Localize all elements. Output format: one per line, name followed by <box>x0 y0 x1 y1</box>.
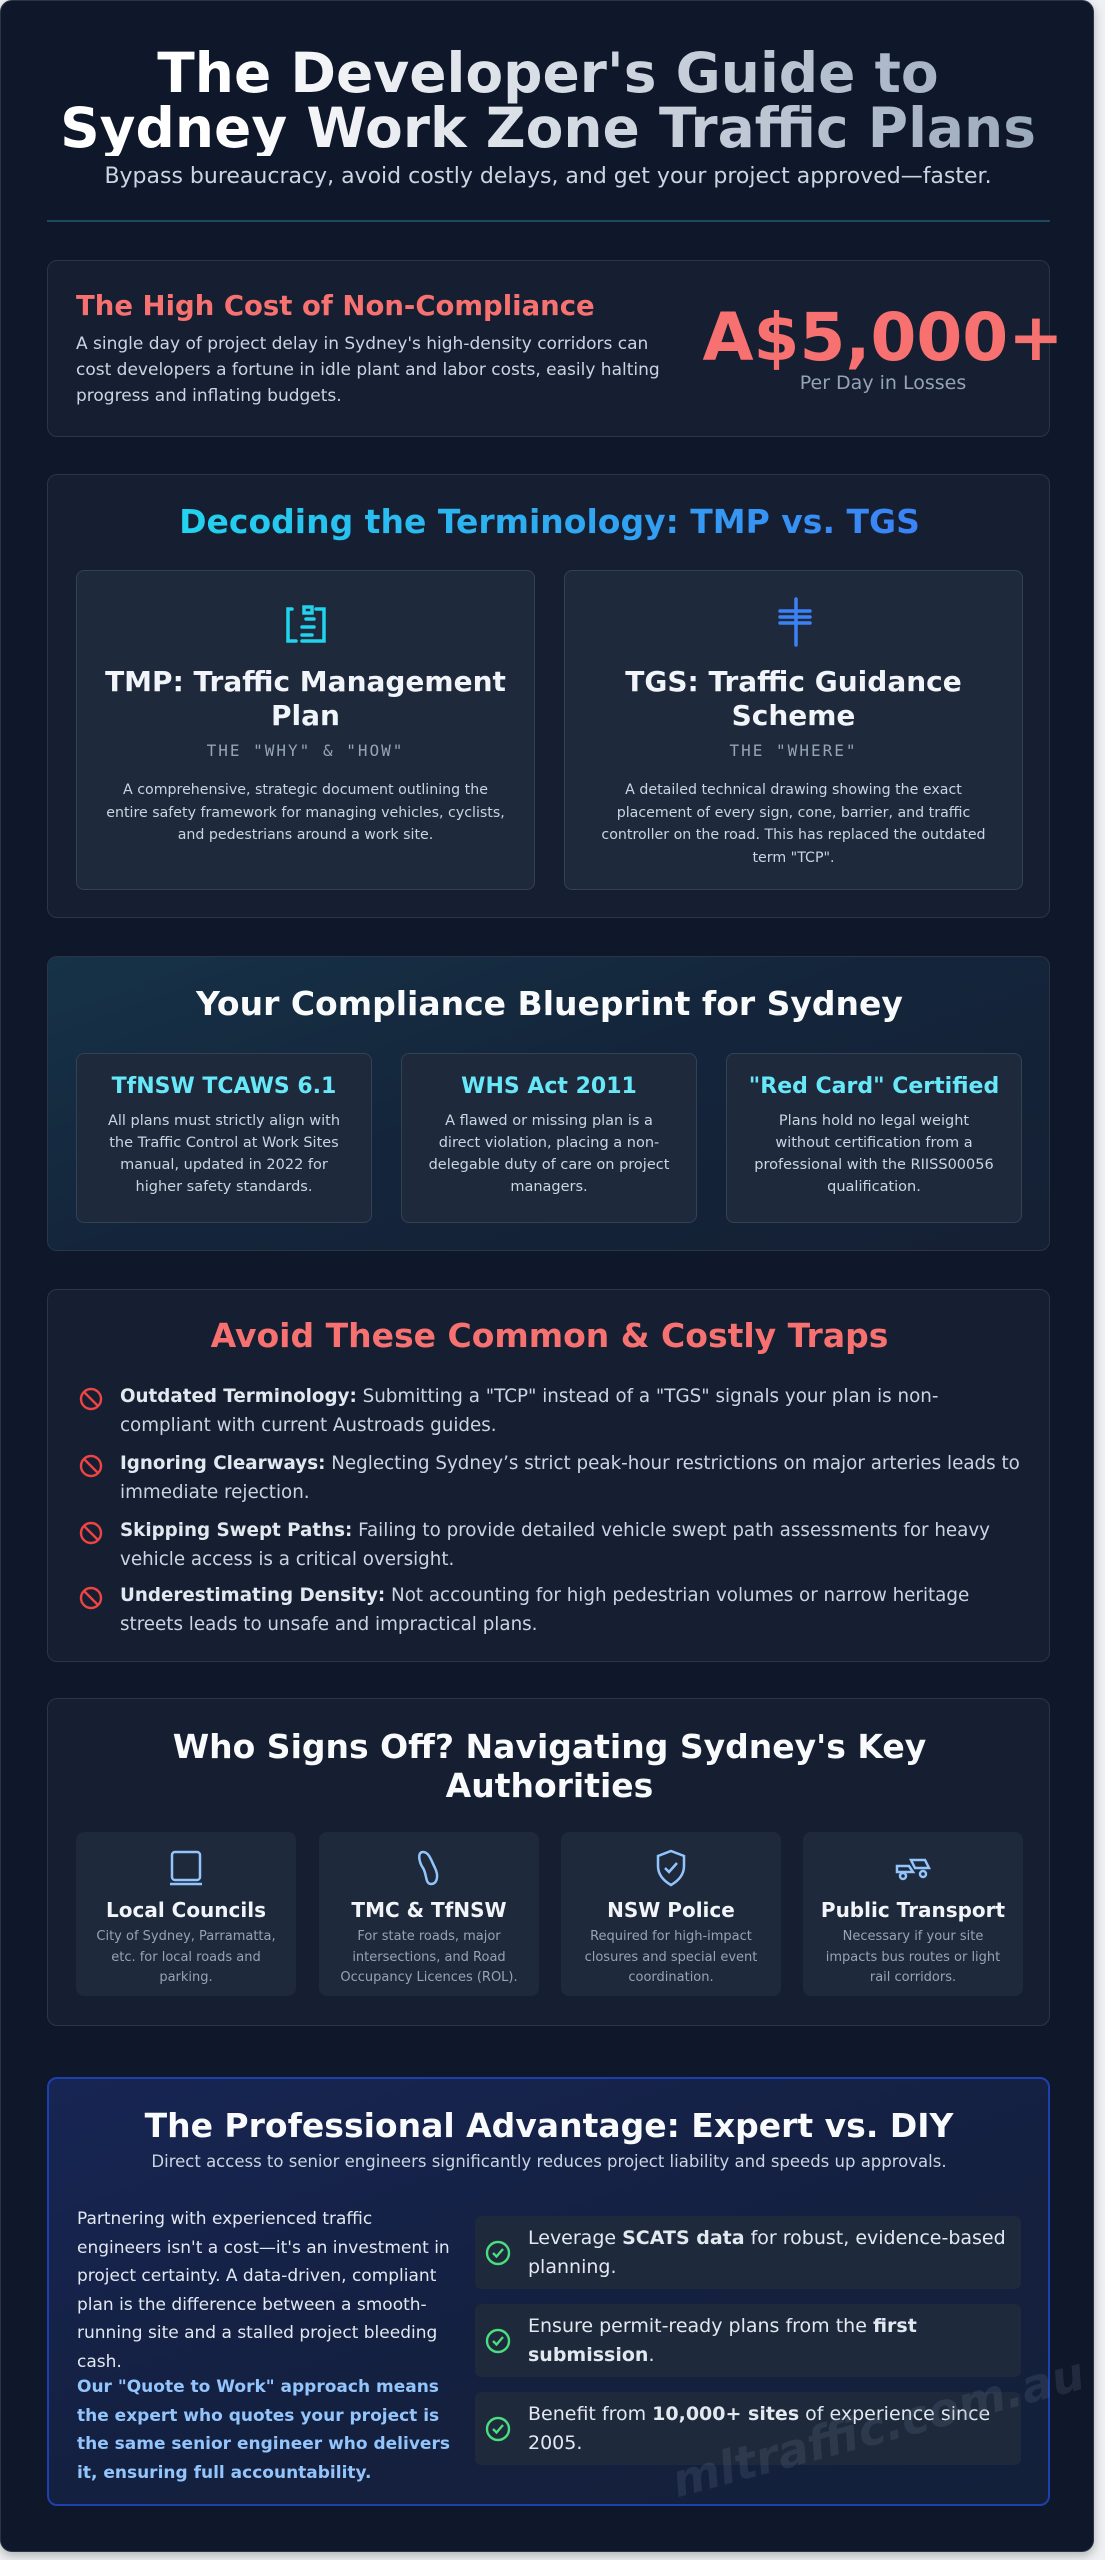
trap: density: Underestimating Density: Not accounting for high pedestrian volumes or narrow heritage streets leads to unsafe and impractical plans. <box>120 1585 969 1635</box>
subtitle: Bypass bureaucracy, avoid costly delays, and get your project approved—faster. <box>104 164 992 189</box>
benefit: SCATS: Leverage SCATS data for robust, evidence-based planning. <box>528 2227 1006 2278</box>
card: public transport: Necessary if your site impacts bus routes or light rail corridors. <box>826 1929 1000 1985</box>
card: TCAWS: TfNSW TCAWS 6.1 <box>112 1074 336 1099</box>
text: TGS description: A detailed technical drawing showing the exact placement of every sign, cone, barrier, and traffic controller on the road. This has replaced the outdated term "TCP". <box>601 782 986 866</box>
trap: swept paths: Skipping Swept Paths: Failing to provide detailed vehicle swept path assessments for heavy vehicle access is a critical oversight. <box>120 1520 990 1570</box>
heading: authorities: Who Signs Off? Navigating Sydney's Key <box>173 1727 926 1766</box>
card: red card: "Red Card" Certified <box>749 1074 999 1099</box>
subtitle: where: THE "WHERE" <box>730 741 857 760</box>
trap: terminology: Outdated Terminology: Submitting a "TCP" instead of a "TGS" signals your plan is non-compliant with current Austroads guides. <box>120 1386 938 1436</box>
card: TCAWS <box>76 1053 372 1223</box>
stat: A$5,000+: A$5,000+ <box>702 299 1064 376</box>
card: WHS: A flawed or missing plan is a direct violation, placing a non-delegable duty of care on project managers. <box>429 1113 669 1195</box>
card: NSW Police: NSW Police <box>607 1898 735 1922</box>
panel: terminology <box>47 474 1050 918</box>
stat: A$5,000+: Per Day in Losses <box>800 372 966 394</box>
benefit: first submission: Ensure permit-ready plans from the first submission. <box>528 2315 917 2366</box>
watermark: mltraffic.com.au <box>666 2346 1090 2508</box>
card: local councils: Local Councils <box>106 1898 266 1922</box>
benefit: SCATS <box>475 2216 1021 2289</box>
text: quote to work: Our "Quote to Work" approach means the expert who quotes your project is the same senior engineer who delivers it, ensuring full accountability. <box>77 2377 450 2483</box>
card: TGS <box>564 570 1023 890</box>
card: WHS <box>401 1053 697 1223</box>
subtitle: why & how: THE "WHY" & "HOW" <box>207 741 404 760</box>
card: local councils <box>76 1832 296 1996</box>
title <box>1 46 1095 156</box>
text: partnering: Partnering with experienced traffic engineers isn't a cost—it's an investment in project certainty. A data-driven, compliant plan is the difference between a smooth-running site and a stalled project bleeding cash. <box>77 2209 450 2372</box>
card: NSW Police <box>561 1832 781 1996</box>
heading: professional advantage: The Professional Advantage: Expert vs. DIY <box>145 2106 953 2145</box>
heading: traps: Avoid These Common & Costly Traps <box>211 1316 888 1355</box>
heading: TMP vs TGS: Decoding the Terminology: TMP vs. TGS <box>179 502 920 541</box>
trap: clearways: Ignoring Clearways: Neglecting Sydney’s strict peak-hour restrictions on major arteries leads to immediate rejection. <box>120 1453 1020 1503</box>
panel: authorities <box>47 1698 1050 2026</box>
card: TMC & TfNSW <box>319 1832 539 1996</box>
panel: compliance blueprint <box>47 956 1050 1251</box>
card: TMC & TfNSW: For state roads, major intersections, and Road Occupancy Licences (ROL). <box>340 1929 518 1985</box>
card: WHS: WHS Act 2011 <box>461 1074 637 1099</box>
card: public transport: Public Transport <box>821 1898 1005 1922</box>
heading: blueprint: Your Compliance Blueprint for Sydney <box>196 984 903 1023</box>
heading: authorities: Authorities <box>446 1766 653 1805</box>
title: TMP: TMP: Traffic Management Plan <box>105 665 506 732</box>
benefit: 10,000+ sites: Benefit from 10,000+ sites of experience since 2005. <box>528 2403 990 2454</box>
benefit: first submission <box>475 2304 1021 2377</box>
card: TCAWS: All plans must strictly align with the Traffic Control at Work Sites manual, updated in 2022 for higher safety standards. <box>108 1113 340 1195</box>
benefit: 10,000+ sites <box>475 2392 1021 2465</box>
card: TMC & TfNSW: TMC & TfNSW <box>351 1898 507 1922</box>
icon: clipboard <box>286 605 326 643</box>
title: Sydney Work Zone Traffic Plans <box>60 96 1036 160</box>
heading: high cost: The High Cost of Non-Compliance <box>76 290 595 322</box>
panel: costly traps <box>47 1289 1050 1662</box>
title: The Developer's Guide to <box>157 41 939 105</box>
heading: authorities <box>173 1727 926 1805</box>
text: TMP description: A comprehensive, strategic document outlining the entire safety framework for managing vehicles, cyclists, and pedestrians around a work site. <box>106 782 505 843</box>
card: public transport <box>803 1832 1023 1996</box>
panel: cost of non-compliance <box>47 260 1050 437</box>
panel: professional advantage <box>47 2077 1050 2506</box>
card: red card <box>726 1053 1022 1223</box>
icon: signs <box>778 597 812 647</box>
card: local councils: City of Sydney, Parramatta, etc. for local roads and parking. <box>96 1929 276 1985</box>
card: TMP <box>76 570 535 890</box>
card: red card: Plans hold no legal weight without certification from a professional with the RIISS00056 qualification. <box>754 1113 994 1195</box>
text: cost description: A single day of project delay in Sydney's high-density corridors can cost developers a fortune in idle plant and labor costs, easily halting progress and inflating budgets. <box>76 334 660 406</box>
card: NSW Police: Required for high-impact closures and special event coordination. <box>585 1929 757 1985</box>
title: TGS: TGS: Traffic Guidance Scheme <box>625 665 962 732</box>
subtitle: senior engineers: Direct access to senior engineers significantly reduces project liability and speeds up approvals. <box>151 2152 947 2171</box>
